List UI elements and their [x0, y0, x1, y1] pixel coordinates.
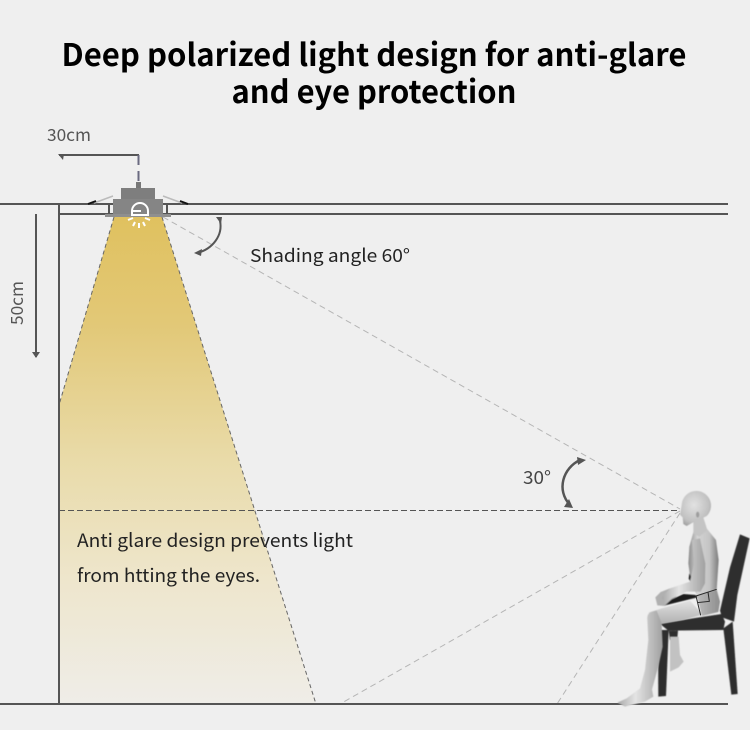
anti-glare caption: from htting the eyes.: [77, 562, 260, 588]
far knee: [655, 588, 677, 606]
near shin and foot: [617, 611, 663, 707]
torso: [688, 528, 719, 595]
neck: [693, 517, 707, 537]
ceiling, wall and floor lines: [0, 204, 728, 704]
seated person on chair: [617, 491, 750, 707]
anti-glare caption: [77, 527, 353, 588]
anti-glare caption: Anti glare design prevents light: [77, 527, 353, 553]
title: Deep polarized light design for anti-glare: [62, 30, 686, 75]
label: 30 degrees: 30°: [523, 464, 551, 490]
light beam cone: [59, 217, 316, 704]
shorts outline: [696, 589, 717, 615]
ear: [696, 512, 699, 518]
beam dashed edges: [59, 217, 316, 704]
downlight fixture: [88, 182, 188, 228]
label: 30cm: 30cm: [47, 121, 91, 146]
arm: [662, 538, 705, 605]
30cm dimension arrow: [58, 154, 139, 185]
icon: light bulb: [128, 203, 150, 228]
title: and eye protection: [232, 67, 516, 112]
far leg: [670, 637, 684, 672]
near thigh: [649, 601, 703, 624]
title: [62, 30, 686, 112]
label: 50cm: 50cm: [3, 281, 28, 325]
50cm dimension arrow: [32, 214, 40, 358]
horizontal eye-level line: [59, 510, 680, 512]
black shorts band: [665, 594, 697, 605]
head: [680, 491, 711, 526]
chair: [658, 534, 750, 697]
30 degree arc arrow: [563, 457, 586, 508]
label: shading angle: Shading angle 60°: [250, 242, 410, 268]
shading angle arrow: [194, 217, 222, 256]
hip: [697, 589, 720, 616]
sight lines: [163, 217, 680, 704]
